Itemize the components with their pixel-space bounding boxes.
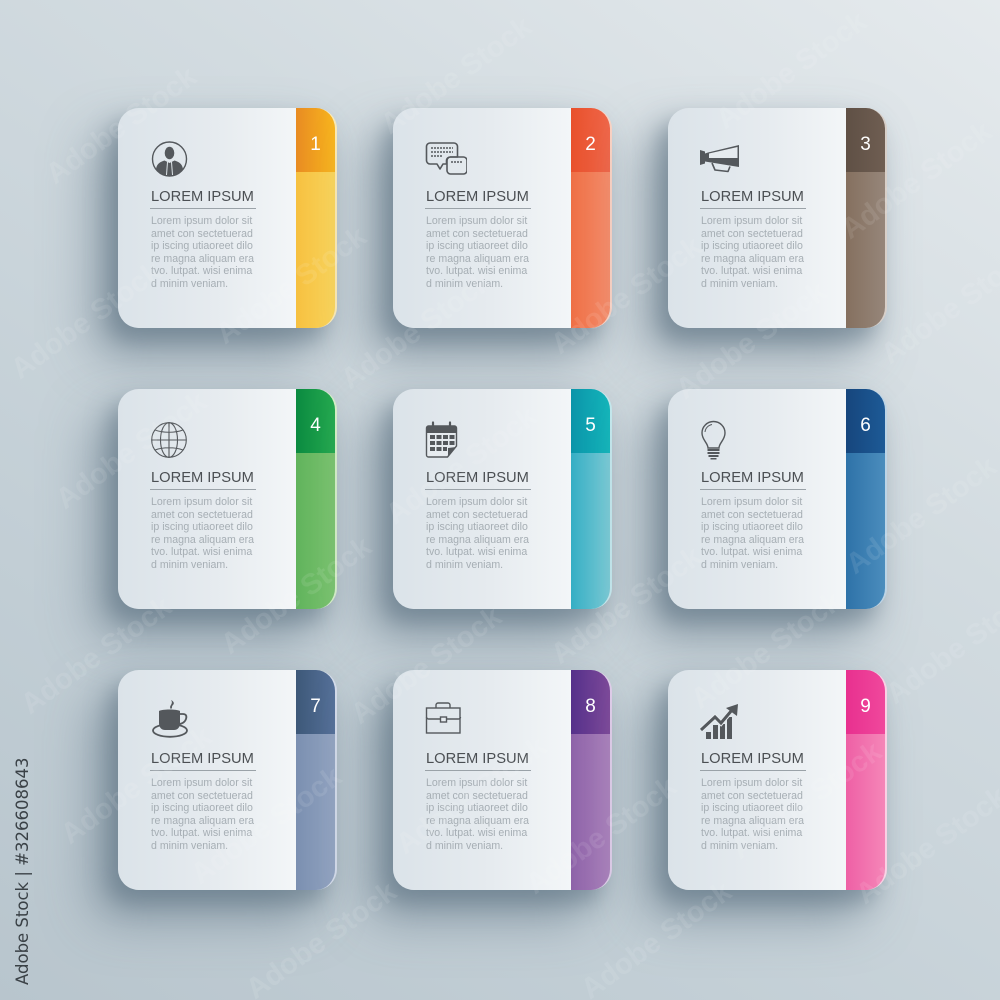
text block	[151, 777, 254, 852]
tab: step 9 number	[846, 670, 887, 890]
watermark overlay: Adobe Stock	[835, 115, 998, 246]
watermark overlay: Adobe Stock	[185, 760, 348, 891]
tab: step 2 number: 2	[585, 134, 596, 155]
text block: tvo. lutpat. wisi enima	[701, 546, 802, 558]
tab: step 3 number	[846, 108, 887, 328]
divider	[425, 208, 531, 209]
text block: Lorem ipsum dolor sit	[426, 777, 527, 789]
text block: re magna aliquam era	[701, 252, 804, 264]
text block: tvo. lutpat. wisi enima	[151, 827, 252, 839]
card body	[393, 670, 571, 890]
heading: LOREM IPSUM	[426, 751, 529, 767]
watermark overlay: Adobe Stock	[380, 400, 543, 531]
text block: Lorem ipsum dolor sit	[151, 777, 252, 789]
tab: step 6 number: 6	[860, 415, 871, 436]
panel: step 1	[118, 108, 337, 328]
text block: Lorem ipsum dolor sit	[426, 496, 527, 508]
watermark overlay: Adobe Stock	[390, 730, 553, 861]
text block: ip iscing utiaoreet dilo	[701, 521, 803, 533]
text block: tvo. lutpat. wisi enima	[426, 546, 527, 558]
tab: step 8 number: 8	[585, 696, 596, 717]
text block: amet con sectetuerad	[426, 508, 528, 520]
text block	[151, 215, 254, 290]
text block: d minim veniam.	[426, 278, 503, 290]
text block: amet con sectetuerad	[701, 790, 803, 802]
watermark overlay: Adobe Stock	[210, 220, 373, 351]
panel: step 9	[668, 670, 887, 890]
heading: LOREM IPSUM	[426, 189, 529, 205]
text block: tvo. lutpat. wisi enima	[701, 265, 802, 277]
stock id label: Adobe Stock | #326608643	[13, 758, 32, 985]
tab: step 6 number	[846, 389, 887, 609]
text block	[426, 777, 529, 852]
text block: amet con sectetuerad	[151, 228, 253, 240]
text block: ip iscing utiaoreet dilo	[701, 240, 803, 252]
text block: ip iscing utiaoreet dilo	[151, 240, 253, 252]
tab: step 9 number: 9	[860, 696, 871, 717]
icon: light bulb	[701, 420, 726, 460]
text block: re magna aliquam era	[426, 252, 529, 264]
card body	[668, 670, 846, 890]
divider	[150, 489, 256, 490]
watermark overlay: Adobe Stock	[710, 5, 873, 136]
text block: Lorem ipsum dolor sit	[151, 496, 252, 508]
text block: ip iscing utiaoreet dilo	[701, 802, 803, 814]
divider	[700, 770, 806, 771]
watermark overlay: Adobe Stock	[685, 585, 848, 716]
watermark overlay: Adobe Stock	[55, 720, 218, 851]
text block	[701, 777, 804, 852]
tab: step 1 number	[296, 108, 337, 328]
tab: step 4 number: 4	[310, 415, 321, 436]
text block: re magna aliquam era	[151, 814, 254, 826]
panel: step 8	[393, 670, 612, 890]
divider	[700, 208, 806, 209]
tab: step 5 number: 5	[585, 415, 596, 436]
heading: LOREM IPSUM	[701, 189, 804, 205]
icon: megaphone	[700, 145, 739, 172]
text block	[426, 496, 529, 570]
text block: amet con sectetuerad	[701, 508, 803, 520]
panel: step 5	[393, 389, 612, 609]
tab: step 7 number	[296, 670, 337, 890]
panel: step 6	[668, 389, 887, 609]
card body	[393, 108, 571, 328]
panel: step 2	[393, 108, 612, 328]
text block: Lorem ipsum dolor sit	[701, 496, 802, 508]
text block: d minim veniam.	[701, 558, 778, 570]
tab: step 4 number	[296, 389, 337, 609]
text block: d minim veniam.	[151, 840, 228, 852]
text block	[701, 496, 804, 570]
text block: amet con sectetuerad	[151, 508, 253, 520]
text block: amet con sectetuerad	[151, 790, 253, 802]
watermark overlay: Adobe Stock	[50, 385, 213, 516]
text block: d minim veniam.	[701, 278, 778, 290]
card body	[668, 389, 846, 609]
divider	[700, 489, 806, 490]
text block: ip iscing utiaoreet dilo	[426, 240, 528, 252]
icon: briefcase	[426, 702, 462, 734]
card body	[393, 389, 571, 609]
tab: step 3 number: 3	[860, 134, 871, 155]
tab: step 7 number: 7	[310, 696, 321, 717]
text block: ip iscing utiaoreet dilo	[426, 521, 528, 533]
text block: Lorem ipsum dolor sit	[701, 215, 802, 227]
watermark overlay: Adobe Stock	[345, 600, 508, 731]
icon: coffee cup	[152, 700, 188, 738]
text block: ip iscing utiaoreet dilo	[426, 802, 528, 814]
text block: re magna aliquam era	[151, 534, 254, 546]
text block: re magna aliquam era	[701, 814, 804, 826]
text block: tvo. lutpat. wisi enima	[701, 827, 802, 839]
panel: step 4	[118, 389, 337, 609]
card body	[668, 108, 846, 328]
text block: tvo. lutpat. wisi enima	[426, 265, 527, 277]
tab: step 2 number	[571, 108, 612, 328]
heading: LOREM IPSUM	[701, 470, 804, 486]
text block: ip iscing utiaoreet dilo	[151, 802, 253, 814]
text block: d minim veniam.	[151, 558, 228, 570]
watermark overlay: Adobe Stock	[375, 10, 538, 141]
watermark overlay: Adobe Stock	[215, 530, 378, 661]
text block: re magna aliquam era	[426, 814, 529, 826]
text block: d minim veniam.	[426, 558, 503, 570]
watermark overlay: Adobe Stock	[840, 450, 1000, 581]
text block: amet con sectetuerad	[426, 228, 528, 240]
text block: d minim veniam.	[701, 840, 778, 852]
text block: ip iscing utiaoreet dilo	[151, 521, 253, 533]
watermark overlay: Adobe Stock	[520, 770, 683, 901]
text block: tvo. lutpat. wisi enima	[151, 546, 252, 558]
text block: Lorem ipsum dolor sit	[151, 215, 252, 227]
heading: LOREM IPSUM	[151, 751, 254, 767]
panel: step 7	[118, 670, 337, 890]
text block: re magna aliquam era	[701, 534, 804, 546]
tab: step 1 number: 1	[310, 134, 321, 155]
watermark overlay: Adobe Stock	[670, 275, 833, 406]
heading: LOREM IPSUM	[151, 189, 254, 205]
heading: LOREM IPSUM	[151, 470, 254, 486]
card body	[118, 670, 296, 890]
text block: d minim veniam.	[426, 840, 503, 852]
card body	[118, 108, 296, 328]
text block	[151, 496, 254, 570]
card body	[118, 389, 296, 609]
text block: re magna aliquam era	[426, 534, 529, 546]
text block: re magna aliquam era	[151, 252, 254, 264]
icon: globe	[151, 422, 187, 458]
icon: calendar	[426, 421, 458, 458]
text block: Lorem ipsum dolor sit	[426, 215, 527, 227]
text block	[701, 215, 804, 290]
divider	[150, 208, 256, 209]
text block: amet con sectetuerad	[426, 790, 528, 802]
heading: LOREM IPSUM	[701, 751, 804, 767]
watermark overlay: Adobe Stock	[725, 735, 888, 866]
text block: tvo. lutpat. wisi enima	[426, 827, 527, 839]
icon: chat bubbles	[426, 142, 467, 175]
text block: d minim veniam.	[151, 278, 228, 290]
watermark overlay: Adobe Stock	[15, 590, 178, 721]
watermark overlay: Adobe Stock	[545, 230, 708, 361]
text block: amet con sectetuerad	[701, 228, 803, 240]
heading: LOREM IPSUM	[426, 470, 529, 486]
watermark overlay: Adobe Stock	[5, 255, 168, 386]
icon: rising chart	[700, 704, 738, 739]
icon: businessman	[152, 141, 188, 177]
tab: step 8 number	[571, 670, 612, 890]
tab: step 5 number	[571, 389, 612, 609]
divider	[425, 770, 531, 771]
watermark overlay: Adobe Stock	[335, 265, 498, 396]
divider	[150, 770, 256, 771]
text block: Lorem ipsum dolor sit	[701, 777, 802, 789]
panel: step 3	[668, 108, 887, 328]
divider	[425, 489, 531, 490]
text block: tvo. lutpat. wisi enima	[151, 265, 252, 277]
watermark overlay: Adobe Stock	[545, 540, 708, 671]
watermark overlay: Adobe Stock	[40, 60, 203, 191]
text block	[426, 215, 529, 290]
